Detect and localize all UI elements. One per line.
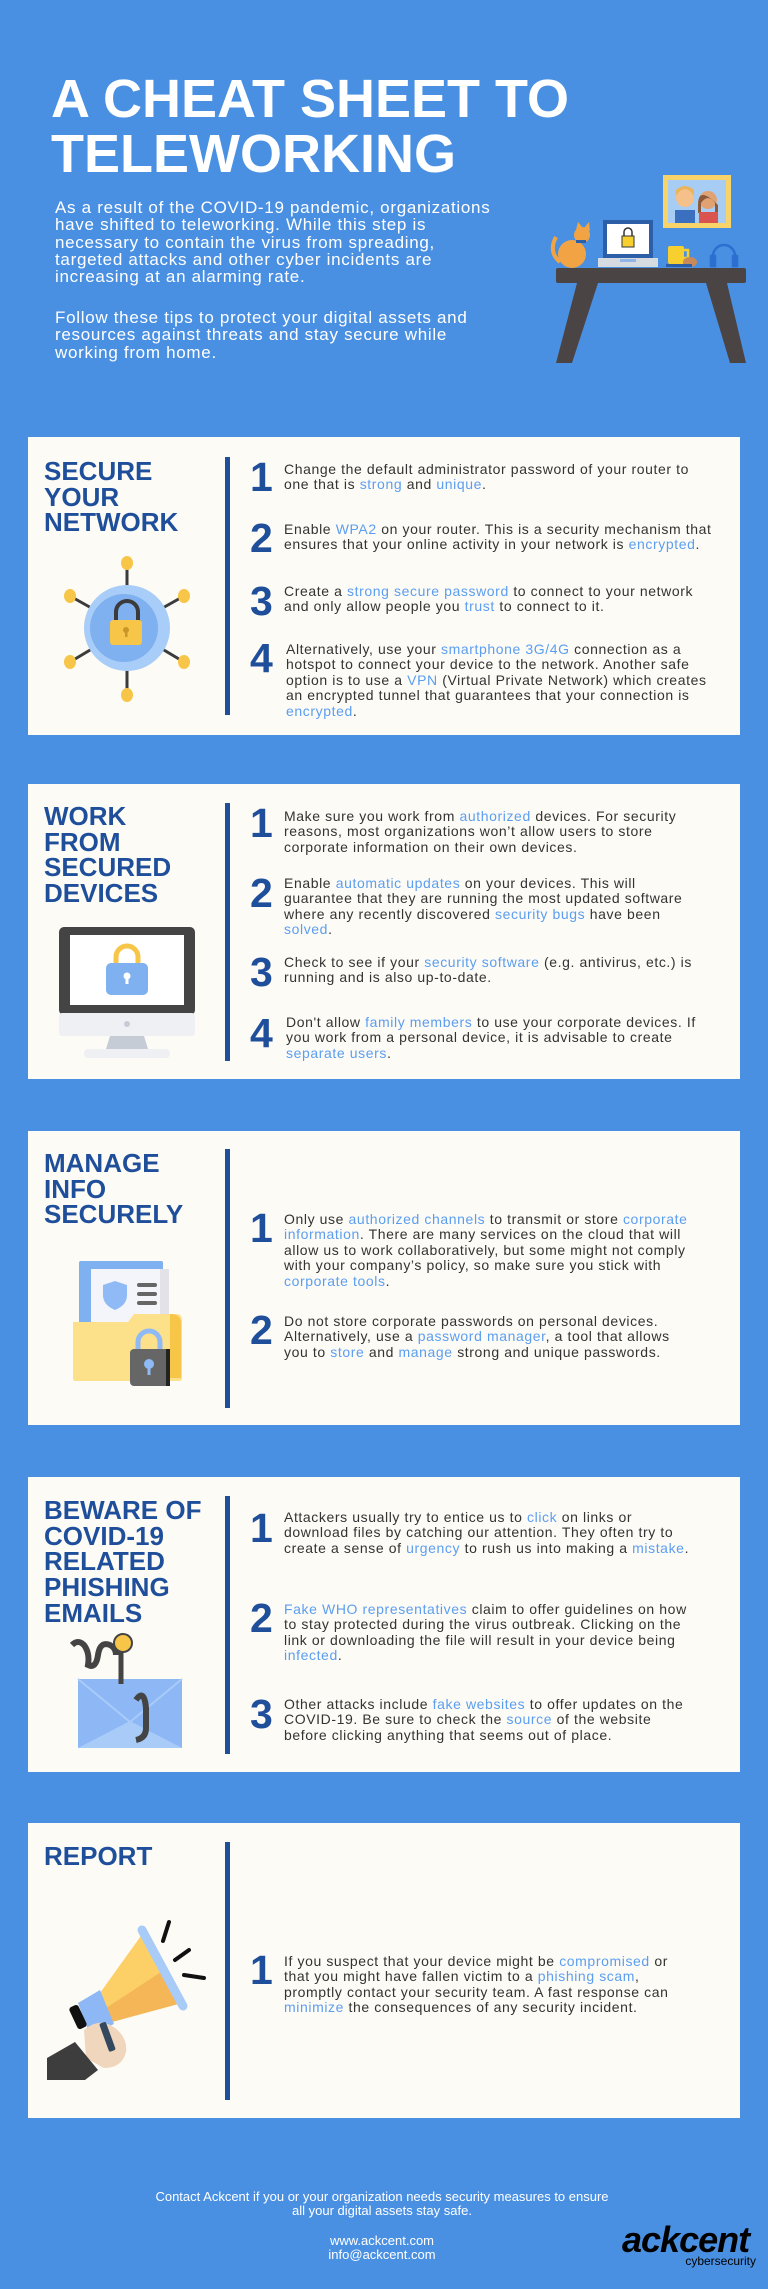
- item 1: [250, 1505, 689, 1556]
- panel: secure your network: ensures that your online activity in your network is encrypted.: [284, 536, 700, 552]
- laptop: [598, 220, 658, 267]
- panel: manage info securely: Alternatively, use a password manager, a tool that allows: [284, 1328, 670, 1344]
- item 4: [250, 1010, 696, 1061]
- panel: work from secured devices: reasons, most organizations won’t allow users to store: [284, 823, 653, 839]
- heading: SECURELY: [44, 1199, 183, 1229]
- icon: monitor lock: [59, 927, 195, 1058]
- table: [556, 268, 746, 363]
- panel: report: promptly contact your security team. A fast response can: [284, 1984, 669, 2000]
- heading: [44, 1495, 201, 1628]
- panel: manage info securely: allow us to work collaboratively, but some might not comply: [284, 1242, 686, 1258]
- panel: beware of phishing: 3: [250, 1691, 273, 1737]
- heading: EMAILS: [44, 1598, 142, 1628]
- panel: beware of phishing: Attackers usually try to entice us to click on links or: [284, 1509, 632, 1525]
- panel: beware of phishing: 2: [250, 1595, 273, 1641]
- intro paragraph 2: Follow these tips to protect your digital assets and: [55, 308, 467, 327]
- item 1: [250, 800, 676, 855]
- panel: work from secured devices: guarantee that they are running the most updated software: [284, 890, 682, 906]
- panel: work from secured devices: 1: [250, 800, 273, 846]
- panel: beware of phishing: link or downloading the file will result in your device being: [284, 1632, 675, 1648]
- icon: phishing envelope: [70, 1633, 182, 1748]
- panel: beware of phishing: download files by catching our attention. They often try to: [284, 1524, 673, 1540]
- panel: manage info securely: [28, 1131, 740, 1425]
- heading: YOUR: [44, 482, 119, 512]
- item 2: [250, 515, 712, 561]
- panel: secure your network: hotspot to connect your device to the network. Another safe: [286, 656, 690, 672]
- panel: manage info securely: Do not store corporate passwords on personal devices.: [284, 1313, 658, 1329]
- icon: folder with lock: [73, 1261, 182, 1386]
- panel: beware of phishing: infected.: [284, 1647, 342, 1663]
- panel: report: 1: [250, 1947, 273, 1993]
- panel: secure your network: one that is strong and unique.: [284, 476, 487, 492]
- heading: [44, 456, 178, 537]
- heading: WORK: [44, 801, 126, 831]
- panel: beware of phishing: COVID-19. Be sure to check the source of the website: [284, 1711, 651, 1727]
- panel: secure your network: and only allow people you trust to connect to it.: [284, 598, 604, 614]
- panel: secure your network: 1: [250, 454, 273, 500]
- panel: report: that you might have fallen victim to a phishing scam,: [284, 1968, 640, 1984]
- heading: [44, 801, 171, 908]
- intro paragraph 2: resources against threats and stay secure while: [55, 325, 447, 344]
- intro paragraph: targeted attacks and other cyber incidents are: [55, 250, 432, 269]
- panel: secure your network: 2: [250, 515, 273, 561]
- heading: COVID-19: [44, 1521, 164, 1551]
- heading: SECURE: [44, 456, 152, 486]
- panel: secure your network: Enable WPA2 on your router. This is a security mechanism that: [284, 521, 712, 537]
- heading: SECURED: [44, 852, 171, 882]
- panel: manage info securely: corporate tools.: [284, 1273, 390, 1289]
- panel: work from secured devices: Check to see if your security software (e.g. antivirus, etc.) is: [284, 954, 692, 970]
- panel: work from secured devices: 4: [250, 1010, 273, 1056]
- footer contact text: Contact Ackcent if you or your organization needs security measures to ensure: [155, 2189, 609, 2204]
- panel: report: [28, 1823, 740, 2118]
- panel: work from secured devices: where any recently discovered security bugs have been: [284, 906, 661, 922]
- panel: work from secured devices: [28, 784, 740, 1079]
- footer contact text: all your digital assets stay safe.: [292, 2203, 472, 2218]
- intro paragraph: have shifted to teleworking. While this step is: [55, 215, 426, 234]
- panel: work from secured devices: running and is also up-to-date.: [284, 969, 492, 985]
- footer links: www.ackcent.com: [330, 2233, 434, 2248]
- item 1: [250, 1205, 688, 1289]
- panel: work from secured devices: Don't allow family members to use your corporate devices. If: [286, 1014, 696, 1030]
- item 3: [250, 949, 692, 995]
- heading: BEWARE OF: [44, 1495, 201, 1525]
- panel: secure your network: an encrypted tunnel that guarantees that your connection is: [286, 687, 690, 703]
- heading: INFO: [44, 1174, 106, 1204]
- heading: [44, 1148, 183, 1229]
- item 1: [250, 1947, 669, 2015]
- footer contact text: [155, 2189, 609, 2218]
- panel: beware of phishing: create a sense of urgency to rush us into making a mistake.: [284, 1540, 689, 1556]
- panel: report: If you suspect that your device might be compromised or: [284, 1953, 668, 1969]
- intro paragraph 2: [55, 308, 467, 362]
- heading: MANAGE: [44, 1148, 160, 1178]
- panel: secure your network: Create a strong secure password to connect to your network: [284, 583, 693, 599]
- panel: secure your network: 3: [250, 578, 273, 624]
- title: [51, 69, 569, 184]
- intro paragraph: As a result of the COVID-19 pandemic, organizations: [55, 198, 490, 217]
- item 2: [250, 1307, 670, 1360]
- panel: beware of phishing: before clicking anything that seems out of place.: [284, 1727, 612, 1743]
- heading: REPORT: [44, 1841, 152, 1871]
- item 3: [250, 1691, 683, 1743]
- footer links: info@ackcent.com: [328, 2247, 436, 2262]
- item 3: [250, 578, 693, 624]
- panel: manage info securely: 2: [250, 1307, 273, 1353]
- panel: secure your network: option is to use a VPN (Virtual Private Network) which creates: [286, 672, 707, 688]
- panel: secure your network: Alternatively, use your smartphone 3G/4G connection as a: [286, 641, 681, 657]
- mug: [666, 246, 697, 267]
- panel: beware of phishing: [28, 1477, 740, 1772]
- heading: RELATED: [44, 1546, 165, 1576]
- panel: work from secured devices: Enable automatic updates on your devices. This will: [284, 875, 636, 891]
- item 4: [250, 635, 707, 719]
- panel: work from secured devices: 2: [250, 870, 273, 916]
- heading: NETWORK: [44, 507, 178, 537]
- icon: network lock: [64, 556, 190, 702]
- logo: cybersecurity: [685, 2254, 756, 2268]
- intro paragraph: increasing at an alarming rate.: [55, 267, 305, 286]
- panel: report: minimize the consequences of any security incident.: [284, 1999, 638, 2015]
- title: A CHEAT SHEET TO: [51, 69, 569, 129]
- panel: secure your network: [28, 437, 740, 735]
- panel: work from secured devices: separate users.: [286, 1045, 392, 1061]
- panel: manage info securely: information. There are many services on the cloud that will: [284, 1226, 681, 1242]
- heading: PHISHING: [44, 1572, 170, 1602]
- headphones: [711, 245, 737, 266]
- panel: manage info securely: you to store and manage strong and unique passwords.: [284, 1344, 661, 1360]
- heading: DEVICES: [44, 878, 158, 908]
- panel: manage info securely: 1: [250, 1205, 273, 1251]
- panel: work from secured devices: corporate information on their own devices.: [284, 839, 578, 855]
- panel: beware of phishing: Other attacks include fake websites to offer updates on the: [284, 1696, 683, 1712]
- panel: beware of phishing: 1: [250, 1505, 273, 1551]
- item 2: [250, 870, 682, 937]
- panel: beware of phishing: Fake WHO representatives claim to offer guidelines on how: [284, 1601, 687, 1617]
- panel: manage info securely: with your company’s policy, so make sure you stick with: [284, 1257, 661, 1273]
- heading: FROM: [44, 827, 121, 857]
- icon: megaphone: [47, 1920, 206, 2080]
- item 1: [250, 454, 689, 500]
- intro paragraph: necessary to contain the virus from spreading,: [55, 233, 435, 252]
- panel: secure your network: 4: [250, 635, 273, 681]
- panel: secure your network: Change the default administrator password of your router to: [284, 461, 689, 477]
- intro paragraph 2: working from home.: [55, 343, 217, 362]
- item 2: [250, 1595, 687, 1663]
- picture frame: [663, 175, 731, 228]
- panel: beware of phishing: to stay protected during the virus outbreak. Clicking on the: [284, 1616, 681, 1632]
- panel: work from secured devices: solved.: [284, 921, 333, 937]
- title: TELEWORKING: [51, 124, 456, 184]
- panel: work from secured devices: Make sure you work from authorized devices. For security: [284, 808, 676, 824]
- footer links: [328, 2233, 436, 2262]
- panel: manage info securely: Only use authorized channels to transmit or store corporate: [284, 1211, 688, 1227]
- illustration: desk: [550, 175, 746, 363]
- panel: work from secured devices: you work from a personal device, it is advisable to create: [286, 1029, 673, 1045]
- panel: work from secured devices: 3: [250, 949, 273, 995]
- logo: ackcent: [622, 2219, 749, 2260]
- cat: [553, 222, 590, 268]
- panel: secure your network: encrypted.: [286, 703, 357, 719]
- intro paragraph: [55, 198, 490, 286]
